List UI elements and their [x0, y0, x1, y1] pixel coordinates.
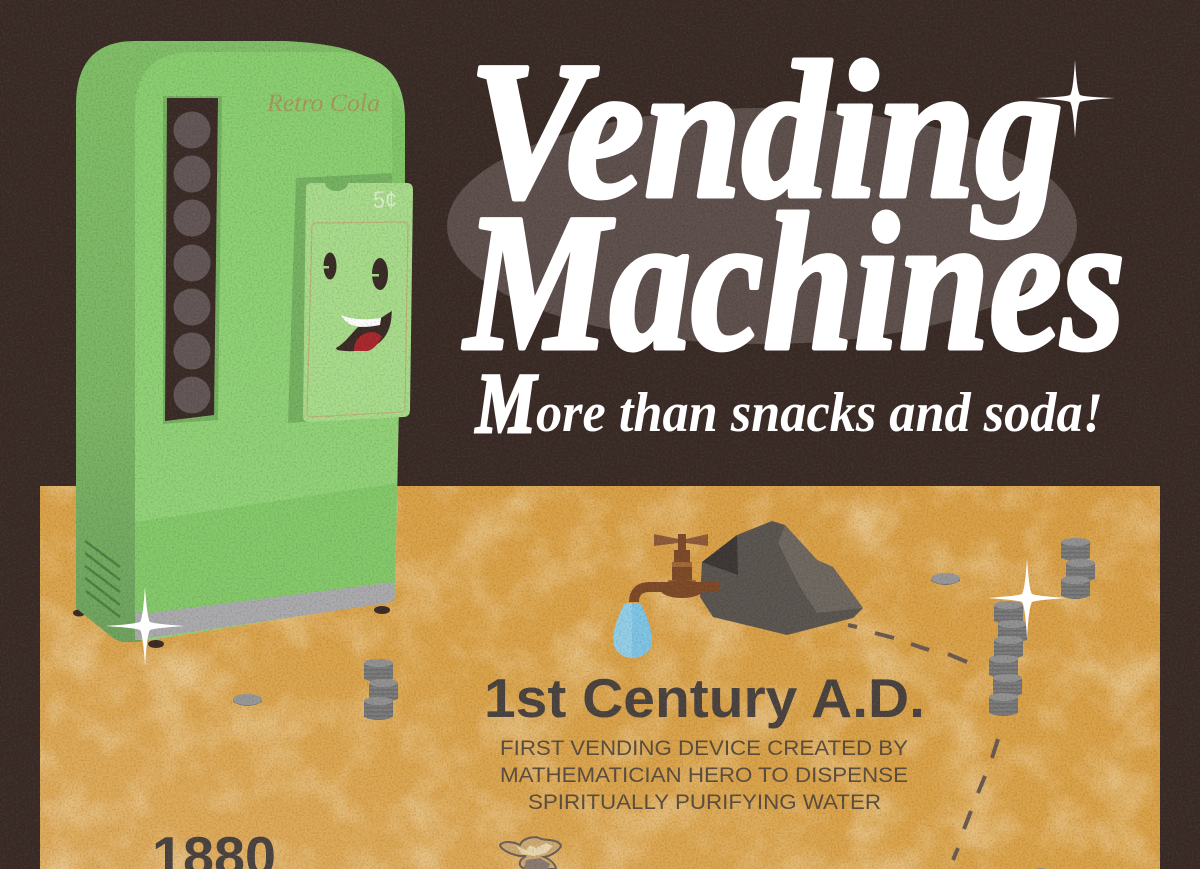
icon: faucet [634, 534, 720, 602]
eye glints [323, 266, 379, 276]
text block: first vending device: MATHEMATICIAN HERO TO DISPENSE [500, 763, 908, 787]
right edge shading [392, 90, 405, 400]
subtitle: More than snacks and soda!: ore than snacks and soda! [536, 382, 1103, 444]
icon: rock [700, 521, 863, 635]
icon: coin stack left [364, 659, 398, 720]
panel: timeline parchment [40, 486, 1160, 869]
subtitle: More than snacks and soda! [474, 355, 1103, 451]
text block: first vending device: SPIRITUALLY PURIFYING WATER [528, 790, 881, 814]
title backdrop ellipse [447, 108, 1077, 344]
coin-column window [165, 98, 218, 421]
icon: single coin left [233, 694, 262, 706]
dashed route lines [848, 625, 998, 860]
door panel [303, 183, 413, 422]
face: teeth [341, 315, 381, 327]
face: tongue [354, 332, 382, 351]
heading: 1st Century A.D.: 1st Century A.D. [484, 667, 925, 729]
illustration: retro vending machine [73, 41, 413, 648]
brand: Retro Cola: Retro Cola [266, 90, 380, 117]
sparkle: machine [105, 586, 185, 666]
machine legs [73, 606, 390, 648]
icon: water drop [613, 603, 652, 658]
icon: tall coin stack [989, 601, 1027, 716]
icon: tied money bag [500, 837, 561, 869]
door shadow [288, 173, 395, 423]
sparkle: coin stack [987, 558, 1067, 638]
face: eyes [324, 252, 388, 290]
coin-column window shadow [163, 96, 222, 424]
price tag: 5 cents: 5¢ [373, 187, 397, 214]
text block: first vending device: FIRST VENDING DEVICE CREATED BY [500, 736, 908, 760]
icon: coin at bottom edge [1031, 868, 1051, 869]
icon: coin stack upper right [1061, 538, 1095, 599]
icon: single coin right [931, 573, 960, 585]
window discs [174, 112, 210, 414]
door notch [325, 183, 348, 191]
side vents [85, 541, 120, 617]
door inner outline [307, 222, 408, 417]
text block: first vending device [500, 736, 908, 814]
sparkle: title [1035, 60, 1115, 138]
title: Vending Machines: Vending [469, 22, 1063, 239]
grey kick plate [135, 582, 395, 640]
machine front face [135, 52, 405, 640]
lower front band [135, 483, 397, 620]
face: mouth [336, 311, 392, 351]
title: Vending Machines [463, 22, 1125, 391]
machine side panel [76, 41, 405, 642]
subtitle: More than snacks and soda!: M [474, 355, 538, 451]
